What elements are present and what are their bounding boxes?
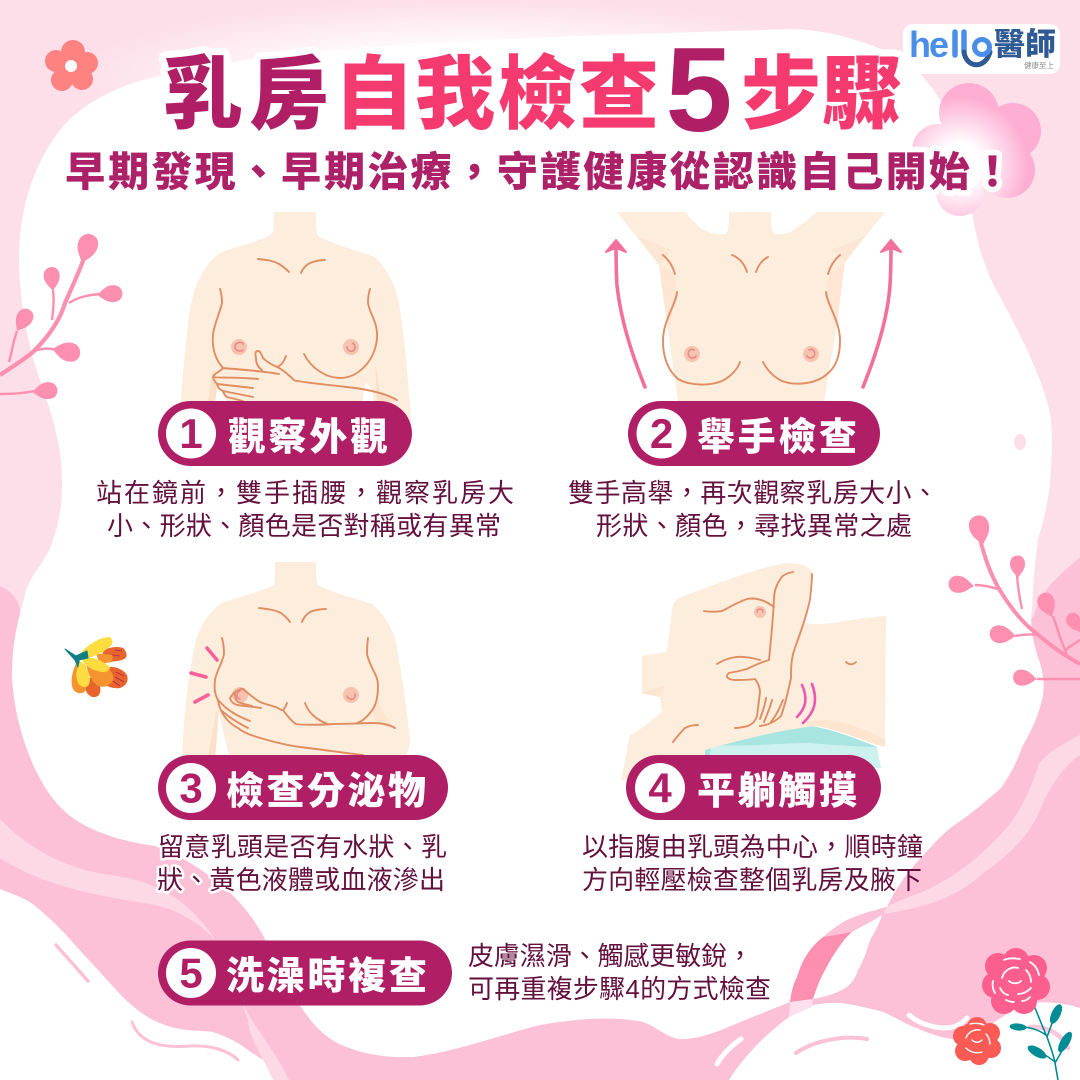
step 1 description — [96, 478, 514, 541]
title: 5 — [666, 23, 732, 157]
step 4 illustration: lying down pillow — [621, 563, 886, 781]
step 1 description: 站在鏡前，雙手插腰，觀察乳房大 — [96, 478, 514, 508]
step 4 description — [582, 832, 923, 895]
title: 乳 — [163, 50, 243, 139]
icon: pink rose — [982, 948, 1050, 1014]
icon: orange yellow flower — [65, 637, 128, 697]
step 5 description: 可再重複步驟4的方式檢查 — [468, 974, 771, 1004]
step 3 description: 狀、黃色液體或血液滲出 — [157, 865, 445, 895]
icon: coral flower top left — [45, 40, 98, 91]
title: 檢 — [497, 50, 577, 139]
step 1 pill: 觀察外觀 — [228, 417, 388, 459]
radiating ticks — [191, 648, 217, 702]
icon: red rose — [953, 1017, 1001, 1065]
step 1 illustration: torso — [180, 212, 411, 420]
step 4 pill: 4 — [648, 764, 672, 812]
step 3 description: 留意乳頭是否有水狀、乳 — [158, 832, 447, 862]
title: 驟 — [822, 50, 902, 139]
step 4 pill: 平躺觸摸 — [697, 771, 857, 813]
step 3 pill: 檢查分泌物 — [226, 770, 426, 813]
icon: large pink flower top right — [912, 83, 1041, 216]
step 2 pill — [628, 401, 880, 466]
step 1 pill: 1 — [179, 410, 203, 457]
title: 步 — [741, 50, 821, 139]
logo: hello 醫師: 健康至上 — [1024, 60, 1054, 70]
step 2 description: 雙手高舉，再次觀察乳房大小、 — [568, 478, 938, 508]
step 1 description: 小、形狀、顏色是否對稱或有異常 — [107, 511, 501, 541]
step 3 description — [157, 832, 447, 895]
arrow: right up — [863, 240, 901, 387]
step 5 pill: 洗澡時複查 — [226, 956, 427, 998]
icon: pink branch right — [948, 514, 1080, 687]
title: 查 — [579, 50, 659, 139]
logo: hello 醫師: he — [909, 24, 949, 65]
logo: hello 醫師: 醫師 — [994, 27, 1056, 62]
title — [163, 23, 902, 157]
step 3 pill: 3 — [179, 764, 203, 812]
step 2 description: 形狀、顏色，尋找異常之處 — [596, 511, 912, 541]
title: 房 — [249, 50, 329, 139]
step 5 pill: 5 — [179, 950, 203, 996]
step 5 description — [468, 941, 771, 1004]
step 5 pill — [158, 940, 452, 1006]
step 2 description — [568, 478, 938, 541]
step 4 description: 以指腹由乳頭為中心，順時鐘 — [582, 832, 923, 862]
vibration arcs — [797, 684, 815, 723]
title: 自 — [334, 50, 414, 139]
title: 我 — [415, 50, 495, 139]
icon: teal stem with leaves — [1009, 1003, 1075, 1080]
step 2 pill: 舉手檢查 — [697, 416, 857, 459]
step 4 description: 方向輕壓檢查整個乳房及腋下 — [582, 865, 922, 895]
step 5 description: 皮膚濕滑、觸感更敏銳， — [468, 941, 753, 971]
step 4 pill — [626, 755, 881, 820]
subtitle: 早期發現、早期治療，守護健康從認識自己開始！ — [65, 149, 1013, 195]
step 3 illustration: torso — [182, 562, 410, 762]
step 2 pill: 2 — [650, 410, 673, 457]
logo: hello 醫師 — [903, 24, 1060, 74]
step 1 pill — [158, 401, 412, 466]
step 3 pill — [158, 755, 448, 820]
arrow: left up — [606, 240, 645, 387]
step 2 illustration: torso with arms raised — [617, 212, 885, 401]
icon: pink branch left — [0, 231, 123, 400]
